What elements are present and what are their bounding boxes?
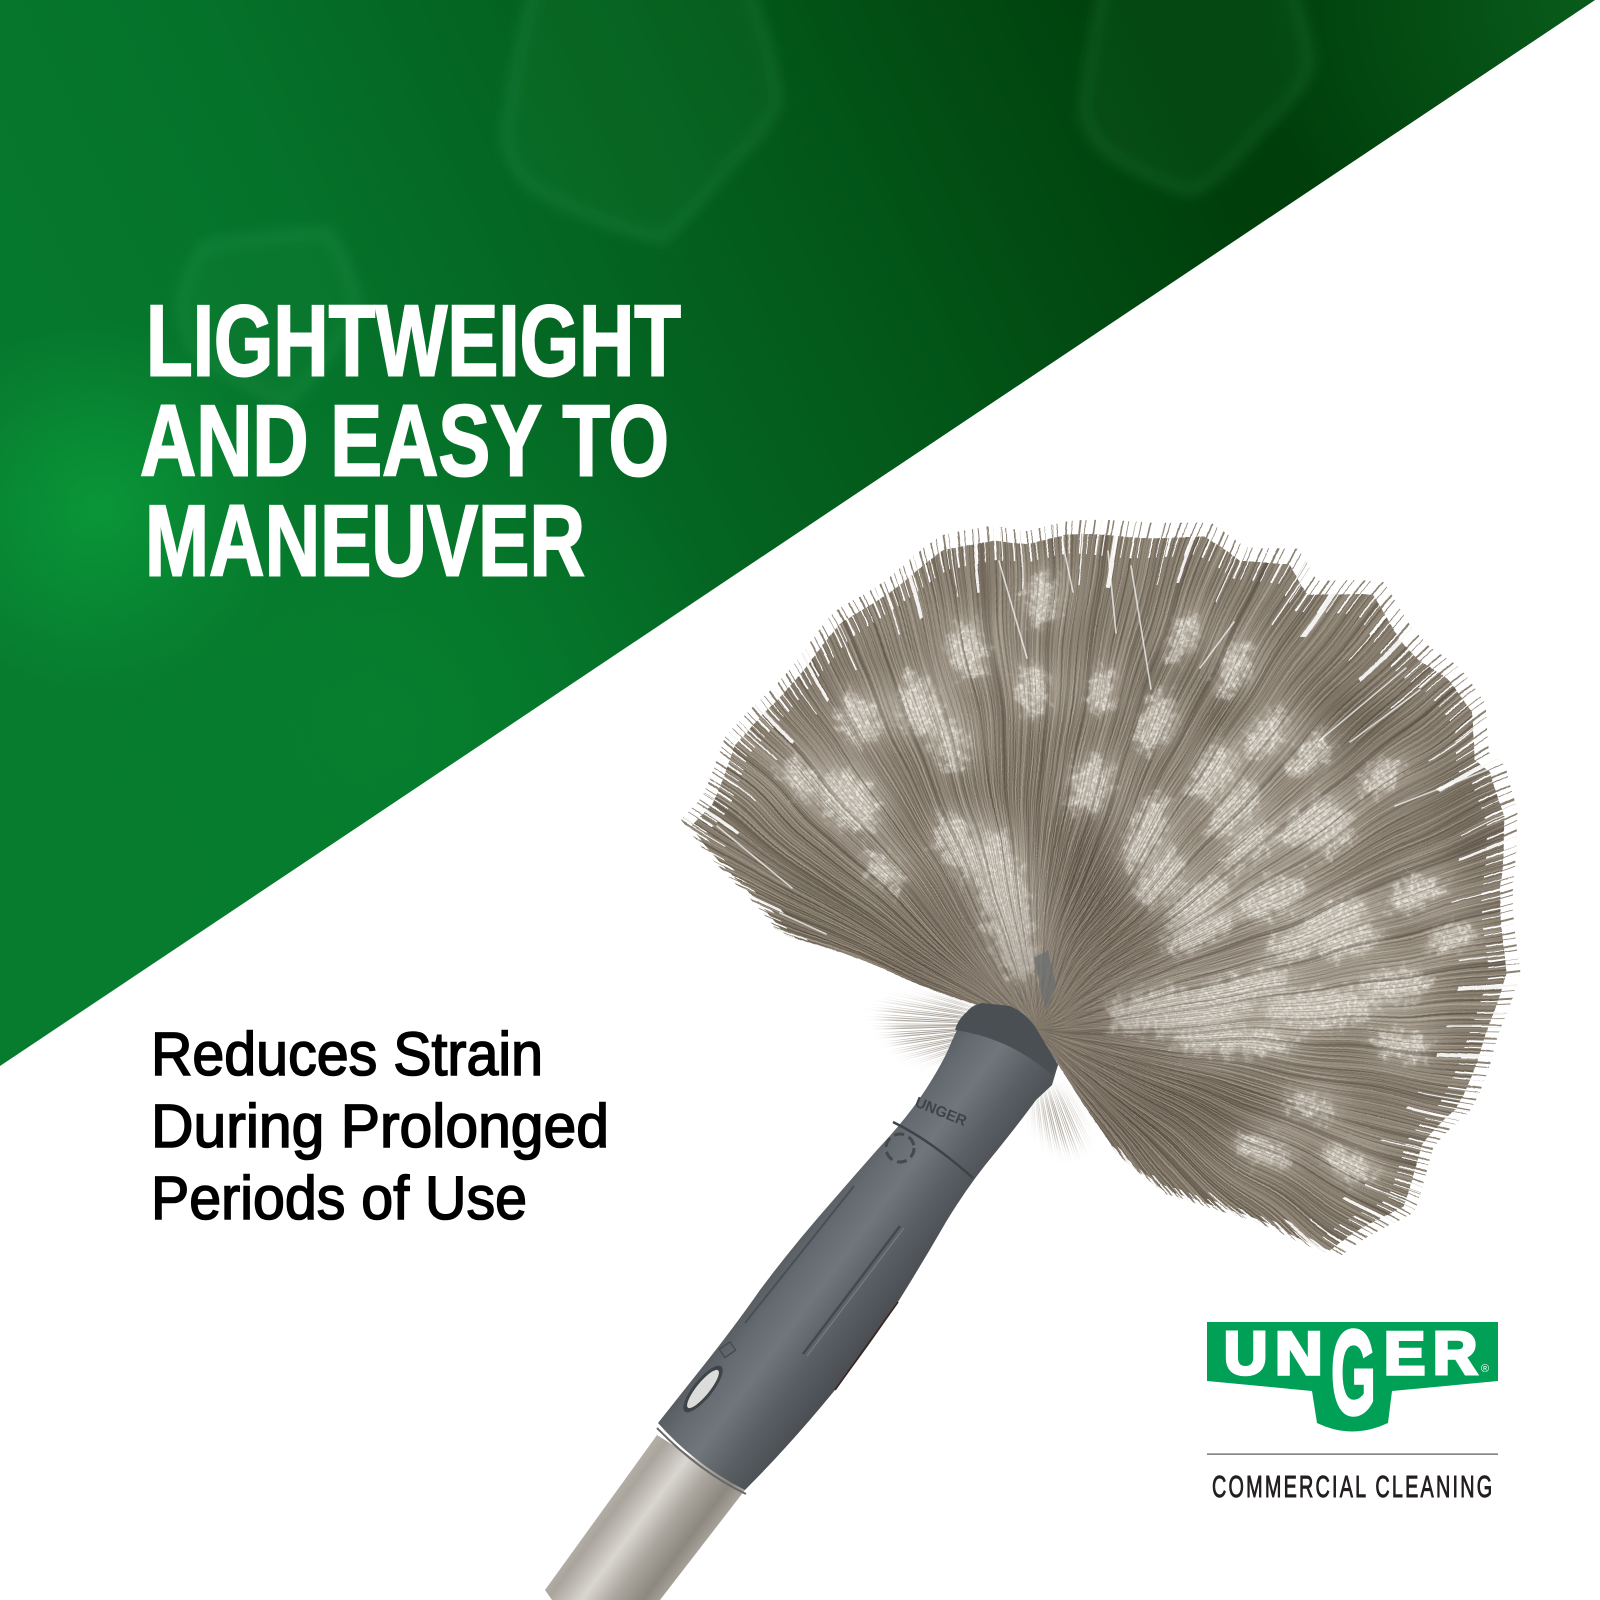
hub collar xyxy=(955,1003,1058,1075)
metal collar edge xyxy=(657,1428,746,1494)
subtitle text block: Reduces Strain xyxy=(151,1020,543,1088)
recycle emboss xyxy=(886,1134,914,1162)
bristle tips beyond silhouette xyxy=(710,705,1350,1345)
white gaps between bristles xyxy=(717,540,1487,934)
logo: Unger xyxy=(1207,1306,1498,1504)
pole: silver metal shaft xyxy=(545,1435,745,1600)
grooves xyxy=(745,1186,854,1323)
frosted light tufts xyxy=(770,566,1484,1190)
grip body xyxy=(658,1003,1058,1490)
logo wordmark: U xyxy=(1224,1320,1267,1387)
tonal shading xyxy=(715,585,1495,1145)
coarse light clumps xyxy=(706,708,1346,1348)
subtitle text block xyxy=(151,1020,609,1232)
brand emboss: UNGER xyxy=(913,1094,969,1130)
lock icon xyxy=(719,1342,736,1358)
subtitle text block: During Prolonged xyxy=(151,1092,609,1160)
panel: green diagonal background xyxy=(0,0,1600,1100)
hub centre xyxy=(1034,950,1056,1010)
fibres over tufts xyxy=(713,707,1353,1347)
duster head: bristles xyxy=(681,520,1520,1256)
logo divider xyxy=(1207,1454,1498,1455)
faint wisps behind duster xyxy=(874,991,1088,1157)
main bristle mass xyxy=(691,534,1506,1250)
logo tagline: COMMERCIAL CLEANING xyxy=(1212,1471,1492,1504)
handle: grey grip xyxy=(657,950,1058,1494)
light fibres xyxy=(712,708,1332,1328)
shadow edge xyxy=(835,1302,898,1390)
comb notches: shallow xyxy=(710,705,1350,1345)
logo badge xyxy=(1207,1322,1498,1432)
dark fibres xyxy=(710,705,1350,1345)
logo wordmark: R xyxy=(1433,1320,1477,1387)
subtitle text block: Periods of Use xyxy=(151,1164,527,1232)
title xyxy=(140,286,681,598)
logo wordmark: E xyxy=(1384,1320,1425,1387)
comb notches: deep xyxy=(710,705,1350,1345)
registered mark: ® xyxy=(1481,1363,1489,1375)
logo wordmark: N xyxy=(1275,1321,1323,1387)
title: AND EASY TO xyxy=(140,386,669,498)
logo wordmark: G xyxy=(1331,1306,1376,1439)
title: LIGHTWEIGHT xyxy=(146,286,681,398)
slot xyxy=(677,1360,729,1418)
coarse dark clumps xyxy=(714,710,1354,1350)
soft light zones xyxy=(770,550,1494,1198)
logo wordmark xyxy=(1224,1306,1477,1439)
seam xyxy=(893,1122,973,1178)
title: MANEUVER xyxy=(145,486,585,598)
